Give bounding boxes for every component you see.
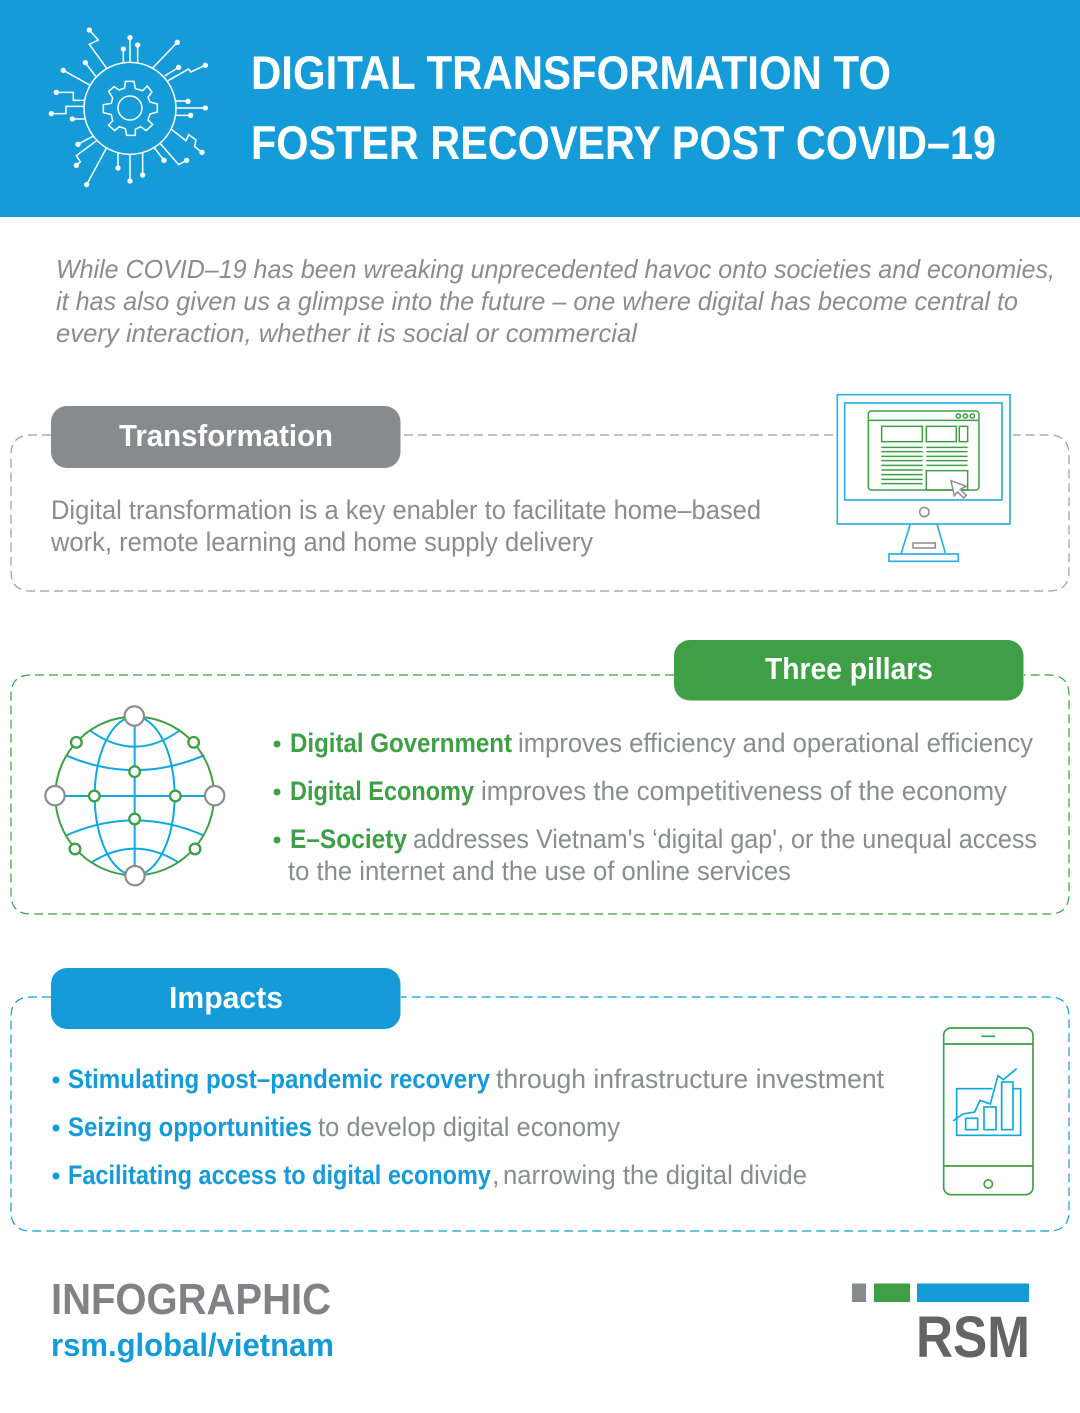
heading: impacts <box>51 968 400 1029</box>
heading: three pillars <box>674 640 1024 700</box>
icon: globe network <box>45 706 224 885</box>
pillars list: E–Society <box>290 824 407 854</box>
pillars list: addresses Vietnam's ‘digital gap', or the unequal access <box>413 824 1037 854</box>
heading: three pillars: Three pillars <box>765 651 933 686</box>
pillars list: improves the competitiveness of the economy <box>481 776 1007 806</box>
panel: three pillars <box>11 640 1069 914</box>
intro text: every interaction, whether it is social or commercial <box>56 318 638 348</box>
icon: gear circuit <box>49 27 208 187</box>
intro text: it has also given us a glimpse into the future – one where digital has become central to <box>56 286 1018 316</box>
impacts list: Seizing opportunities <box>68 1112 312 1142</box>
footer: infographic label <box>51 1275 334 1363</box>
impacts list: through infrastructure investment <box>496 1064 884 1094</box>
intro text <box>56 254 1055 348</box>
title: FOSTER RECOVERY POST COVID–19 <box>251 116 996 169</box>
pillars list: Digital Economy <box>290 776 474 806</box>
title: DIGITAL TRANSFORMATION TO <box>251 46 891 99</box>
heading: impacts: Impacts <box>169 980 283 1015</box>
icon: smartphone chart <box>944 1028 1033 1195</box>
impacts list: Stimulating post–pandemic recovery <box>68 1064 490 1094</box>
transformation text: work, remote learning and home supply delivery <box>50 527 593 557</box>
header band <box>0 0 1080 217</box>
panel: transformation <box>11 395 1069 591</box>
footer: infographic label: rsm.global/vietnam <box>51 1327 334 1363</box>
transformation text: Digital transformation is a key enabler to facilitate home–based <box>51 495 761 525</box>
pillars list <box>274 728 1037 886</box>
intro text: While COVID–19 has been wreaking unprecedented havoc onto societies and economies, <box>56 254 1055 284</box>
impacts list: , <box>492 1160 500 1190</box>
impacts list: narrowing the digital divide <box>503 1160 807 1190</box>
pillars list: Digital Government <box>290 728 512 758</box>
impacts list <box>52 1064 884 1190</box>
impacts list: Facilitating access to digital economy <box>68 1160 491 1190</box>
transformation text <box>50 495 761 557</box>
footer: infographic label: INFOGRAPHIC <box>51 1275 331 1324</box>
logo: RSM <box>852 1284 1030 1370</box>
pillars list: to the internet and the use of online services <box>288 856 791 886</box>
icon: desktop monitor <box>837 395 1010 561</box>
impacts list: to develop digital economy <box>318 1112 620 1142</box>
heading: transformation: Transformation <box>119 418 333 453</box>
pillars list: improves efficiency and operational efficiency <box>518 728 1033 758</box>
panel: impacts <box>11 968 1069 1231</box>
heading: transformation <box>51 406 400 468</box>
logo: RSM: RSM <box>916 1305 1030 1370</box>
title <box>251 46 996 169</box>
